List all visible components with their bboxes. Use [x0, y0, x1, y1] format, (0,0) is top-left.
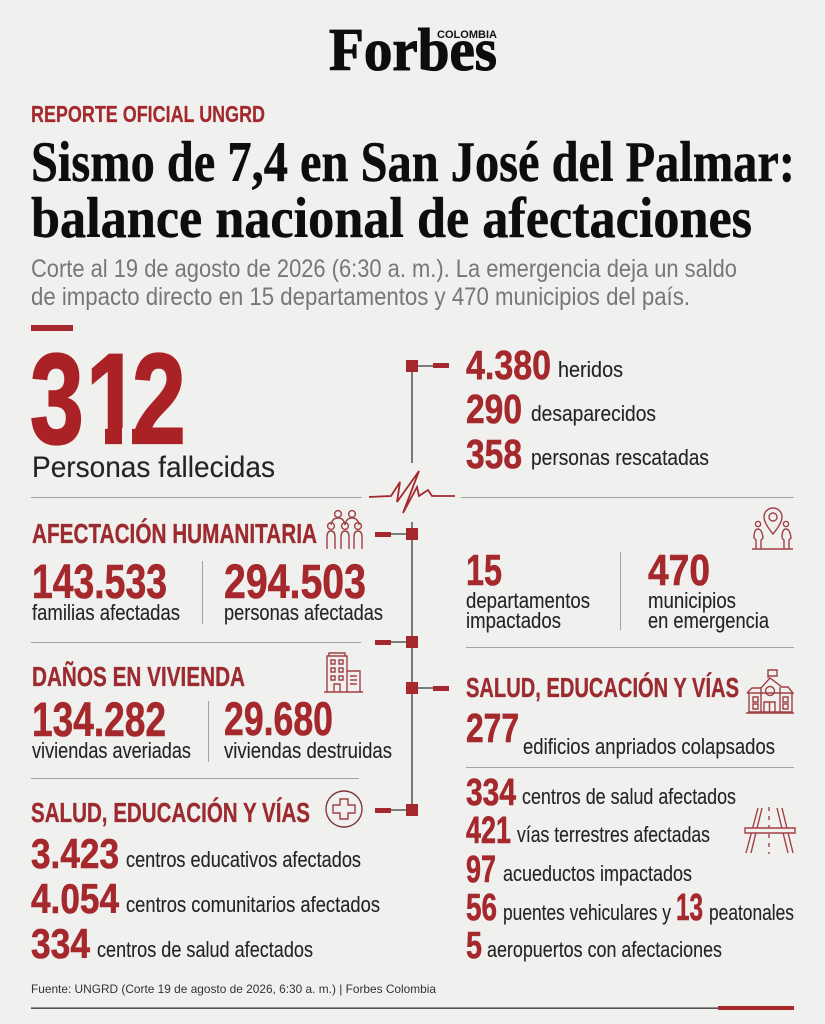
panel: salud, educación y vías derecha: 277 — [466, 705, 519, 751]
stats: heridos, desaparecidos, rescatadas — [466, 342, 709, 477]
main stat: fallecidos: 312 — [30, 328, 186, 471]
icon: medical cross — [326, 791, 362, 827]
panel: afectación humanitaria: personas afectadas — [224, 600, 383, 625]
panel: departamentos y municipios — [466, 546, 770, 633]
main stat: fallecidos — [30, 328, 275, 484]
panel: departamentos y municipios: departamentos — [466, 588, 590, 613]
panel: daños en vivienda — [32, 661, 392, 763]
panel: daños en vivienda: viviendas averiadas — [32, 738, 191, 763]
icon: road overpass — [745, 807, 795, 854]
subtitle: de impacto directo en 15 departamentos y 470 municipios del país. — [31, 283, 690, 311]
panel: salud, educación y vías derecha: aeropuertos con afectaciones — [487, 937, 722, 962]
icon: school — [746, 670, 794, 713]
title — [31, 131, 795, 250]
logo: Forbes Colombia: Forbes — [329, 17, 497, 83]
panel: salud, educación y vías izquierda: centros educativos afectados — [126, 847, 361, 872]
stats: heridos, desaparecidos, rescatadas: desaparecidos — [531, 401, 656, 426]
panel: afectación humanitaria — [32, 518, 383, 625]
panel: salud, educación y vías derecha: centros de salud afectados — [522, 784, 736, 809]
panel: departamentos y municipios: 470 — [648, 546, 710, 595]
panel: salud, educación y vías izquierda: centros de salud afectados — [97, 937, 313, 962]
panel: salud, educación y vías derecha: 56 — [466, 887, 497, 929]
panel: afectación humanitaria: familias afectadas — [32, 600, 180, 625]
panel: daños en vivienda: DAÑOS EN VIVIENDA — [32, 661, 245, 692]
panel: departamentos y municipios: 15 — [466, 546, 502, 595]
panel: departamentos y municipios: en emergencia — [648, 608, 770, 633]
panel: salud, educación y vías derecha: peatonales — [709, 900, 794, 925]
source note: Fuente: UNGRD (Corte 19 de agosto de 2026, 6:30 a. m.) | Forbes Colombia — [31, 982, 436, 996]
panel: afectación humanitaria: 294.503 — [224, 556, 366, 609]
panel: daños en vivienda: 29.680 — [224, 692, 333, 745]
panel: afectación humanitaria: 143.533 — [32, 556, 167, 609]
panel: salud, educación y vías izquierda: centros comunitarios afectados — [126, 892, 380, 917]
panel: salud, educación y vías izquierda: 3.423 — [31, 830, 119, 877]
stats: heridos, desaparecidos, rescatadas: 290 — [466, 386, 522, 432]
panel: salud, educación y vías izquierda: SALUD, EDUCACIÓN Y VÍAS — [31, 797, 310, 828]
panel: salud, educación y vías derecha: 13 — [676, 887, 703, 929]
stats: heridos, desaparecidos, rescatadas: personas rescatadas — [531, 445, 709, 470]
subtitle — [31, 255, 737, 311]
icon: group of people — [327, 511, 362, 549]
title: balance nacional de afectaciones — [31, 187, 752, 250]
stats: heridos, desaparecidos, rescatadas: heridos — [558, 357, 623, 382]
icon: seismic wave — [369, 471, 455, 513]
panel: departamentos y municipios: impactados — [466, 608, 561, 633]
stats: heridos, desaparecidos, rescatadas: 4.380 — [466, 342, 551, 388]
panel: departamentos y municipios: municipios — [648, 588, 736, 613]
panel: salud, educación y vías derecha: 97 — [466, 849, 496, 891]
stats: heridos, desaparecidos, rescatadas: 358 — [466, 431, 522, 477]
panel: salud, educación y vías izquierda: 334 — [31, 920, 91, 967]
panel: salud, educación y vías izquierda — [31, 797, 380, 967]
logo: Forbes Colombia: COLOMBIA — [437, 29, 497, 41]
panel: salud, educación y vías derecha — [466, 672, 794, 967]
accent bar — [31, 325, 73, 331]
icon: location with people — [752, 508, 793, 549]
panel: salud, educación y vías derecha: puentes vehiculares y — [503, 900, 671, 925]
panel: daños en vivienda: viviendas destruidas — [224, 738, 392, 763]
panel: salud, educación y vías derecha: 421 — [466, 810, 511, 852]
panel: salud, educación y vías derecha: 5 — [466, 925, 482, 967]
bottom rule — [31, 1006, 794, 1010]
panel: daños en vivienda: 134.282 — [32, 694, 166, 747]
main stat: fallecidos: Personas fallecidas — [32, 451, 275, 484]
kicker: REPORTE OFICIAL UNGRD — [31, 101, 265, 127]
subtitle: Corte al 19 de agosto de 2026 (6:30 a. m.). La emergencia deja un saldo — [31, 255, 737, 283]
panel: salud, educación y vías derecha: 334 — [466, 772, 516, 814]
panel: salud, educación y vías derecha: vías terrestres afectadas — [517, 822, 710, 847]
icon: buildings — [324, 653, 363, 692]
panel: salud, educación y vías izquierda: 4.054 — [31, 875, 120, 922]
panel: afectación humanitaria: AFECTACIÓN HUMANITARIA — [32, 518, 317, 549]
timeline spine with nodes — [375, 360, 449, 816]
panel: salud, educación y vías derecha: edificios anpriados colapsados — [523, 734, 775, 759]
panel: salud, educación y vías derecha: acueductos impactados — [503, 861, 692, 886]
